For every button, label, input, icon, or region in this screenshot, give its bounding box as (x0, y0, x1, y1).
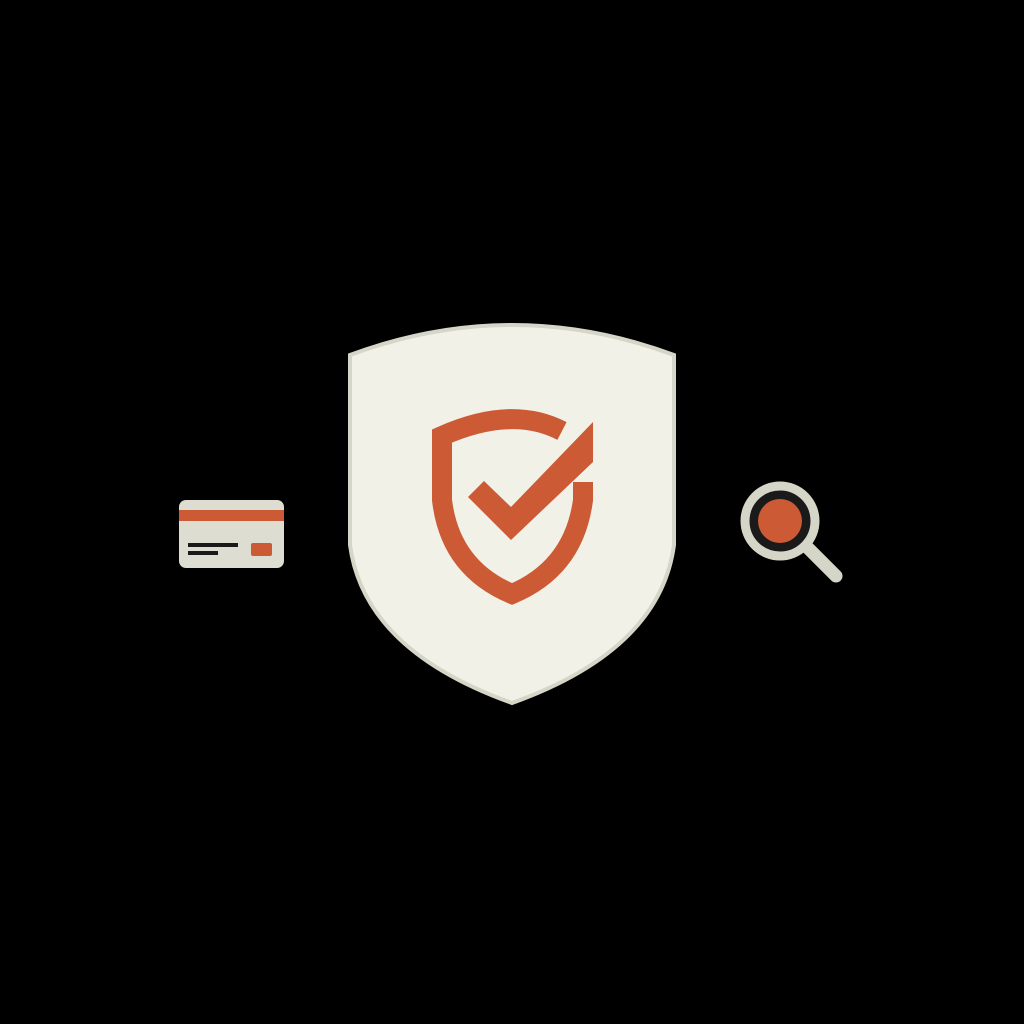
icon: shield check emblem (442, 419, 593, 594)
shield: central badge (350, 325, 674, 703)
icon: payment card (179, 500, 284, 568)
icon: magnifying glass (745, 486, 836, 576)
